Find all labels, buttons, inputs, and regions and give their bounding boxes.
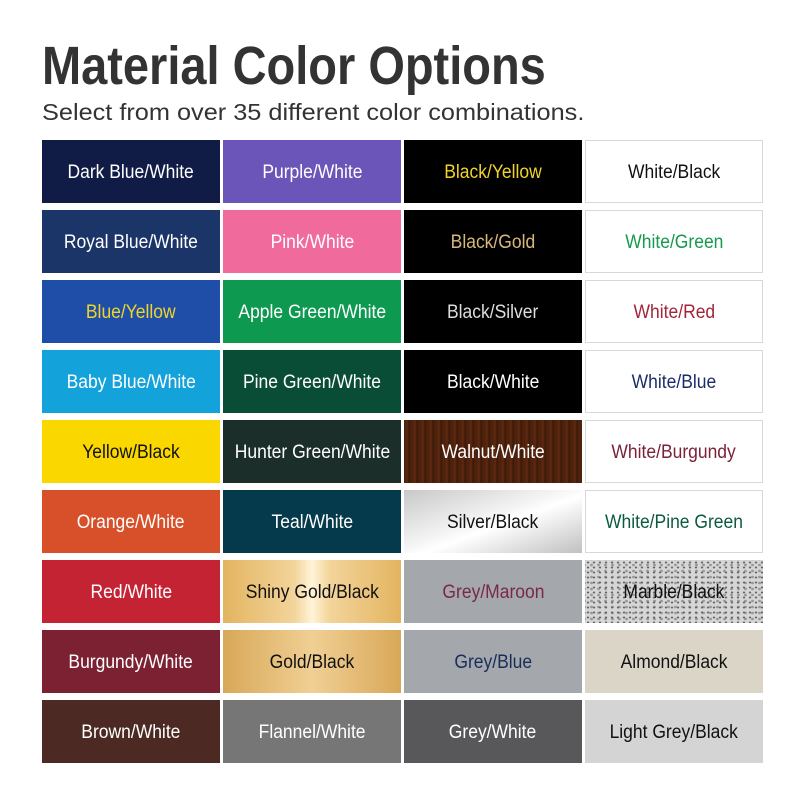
swatch: Pink/White: Pink/White xyxy=(270,232,354,252)
swatch: Burgundy/White: Burgundy/White xyxy=(69,652,193,672)
swatch: Black/Gold: Black/Gold xyxy=(451,232,535,252)
swatch: Black/Silver: Black/Silver xyxy=(447,302,539,322)
swatch: White/Green: White/Green xyxy=(625,232,723,252)
swatch: Yellow/Black xyxy=(42,420,220,483)
swatch: Shiny Gold/Black xyxy=(223,560,401,623)
swatch: Brown/White: Brown/White xyxy=(81,722,181,742)
swatch: Silver/Black: Silver/Black xyxy=(447,512,539,532)
swatch: White/Black xyxy=(585,140,763,203)
swatch: Royal Blue/White xyxy=(42,210,220,273)
swatch: Black/Silver xyxy=(404,280,582,343)
swatch: Shiny Gold/Black: Shiny Gold/Black xyxy=(245,582,379,602)
title: Material Color Options xyxy=(42,36,546,96)
swatch: White/Pine Green xyxy=(585,490,763,553)
swatch: Grey/White xyxy=(404,700,582,763)
swatch: Hunter Green/White: Hunter Green/White xyxy=(234,442,390,462)
swatch: White/Pine Green: White/Pine Green xyxy=(605,512,743,532)
swatch: Red/White xyxy=(42,560,220,623)
swatch: Silver/Black xyxy=(404,490,582,553)
swatch: Orange/White xyxy=(42,490,220,553)
swatch: Dark Blue/White: Dark Blue/White xyxy=(68,162,194,182)
swatch: Flannel/White xyxy=(223,700,401,763)
swatch: Pine Green/White: Pine Green/White xyxy=(243,372,381,392)
swatch: Light Grey/Black: Light Grey/Black xyxy=(610,722,738,742)
swatch: Teal/White: Teal/White xyxy=(271,512,353,532)
swatch: Almond/Black: Almond/Black xyxy=(621,652,727,672)
swatch: Apple Green/White xyxy=(223,280,401,343)
swatch: White/Blue: White/Blue xyxy=(632,372,716,392)
swatch: Brown/White xyxy=(42,700,220,763)
swatch: Purple/White xyxy=(223,140,401,203)
swatch: Royal Blue/White: Royal Blue/White xyxy=(64,232,198,252)
swatch: Blue/Yellow xyxy=(42,280,220,343)
swatch: Gold/Black xyxy=(223,630,401,693)
swatch: White/Burgundy: White/Burgundy xyxy=(612,442,736,462)
swatch: Walnut/White: Walnut/White xyxy=(441,442,545,462)
swatch: White/Red: White/Red xyxy=(633,302,715,322)
swatch: Gold/Black: Gold/Black xyxy=(270,652,354,672)
swatch: Orange/White: Orange/White xyxy=(77,512,185,532)
swatch: Dark Blue/White xyxy=(42,140,220,203)
swatch: Grey/Maroon xyxy=(404,560,582,623)
swatch: Black/Gold xyxy=(404,210,582,273)
swatch: Pink/White xyxy=(223,210,401,273)
subtitle: Select from over 35 different color combinations. xyxy=(42,99,584,125)
swatch: Black/White: Black/White xyxy=(447,372,539,392)
swatch: Flannel/White: Flannel/White xyxy=(259,722,365,742)
swatch: White/Green xyxy=(585,210,763,273)
swatch: Baby Blue/White: Baby Blue/White xyxy=(66,372,196,392)
swatch: Marble/Black: Marble/Black xyxy=(623,582,725,602)
swatch: Pine Green/White xyxy=(223,350,401,413)
swatch: Almond/Black xyxy=(585,630,763,693)
swatch: White/Red xyxy=(585,280,763,343)
swatch: Grey/Maroon: Grey/Maroon xyxy=(442,582,544,602)
swatch: Purple/White: Purple/White xyxy=(262,162,362,182)
swatch: Apple Green/White: Apple Green/White xyxy=(238,302,386,322)
swatch: Marble/Black xyxy=(585,560,763,623)
swatch: Black/White xyxy=(404,350,582,413)
swatch: Grey/Blue xyxy=(404,630,582,693)
swatch: Black/Yellow: Black/Yellow xyxy=(444,162,542,182)
swatch: Grey/White: Grey/White xyxy=(449,722,537,742)
swatch: Teal/White xyxy=(223,490,401,553)
swatch: Blue/Yellow: Blue/Yellow xyxy=(86,302,176,322)
swatch: White/Blue xyxy=(585,350,763,413)
swatch: Red/White: Red/White xyxy=(90,582,172,602)
swatch: White/Burgundy xyxy=(585,420,763,483)
swatch: Hunter Green/White xyxy=(223,420,401,483)
swatch: Burgundy/White xyxy=(42,630,220,693)
swatch: White/Black: White/Black xyxy=(628,162,720,182)
swatch: Yellow/Black: Yellow/Black xyxy=(82,442,180,462)
swatch: Black/Yellow xyxy=(404,140,582,203)
swatch: Walnut/White xyxy=(404,420,582,483)
swatch: Light Grey/Black xyxy=(585,700,763,763)
swatch: Grey/Blue: Grey/Blue xyxy=(454,652,532,672)
swatch: Baby Blue/White xyxy=(42,350,220,413)
